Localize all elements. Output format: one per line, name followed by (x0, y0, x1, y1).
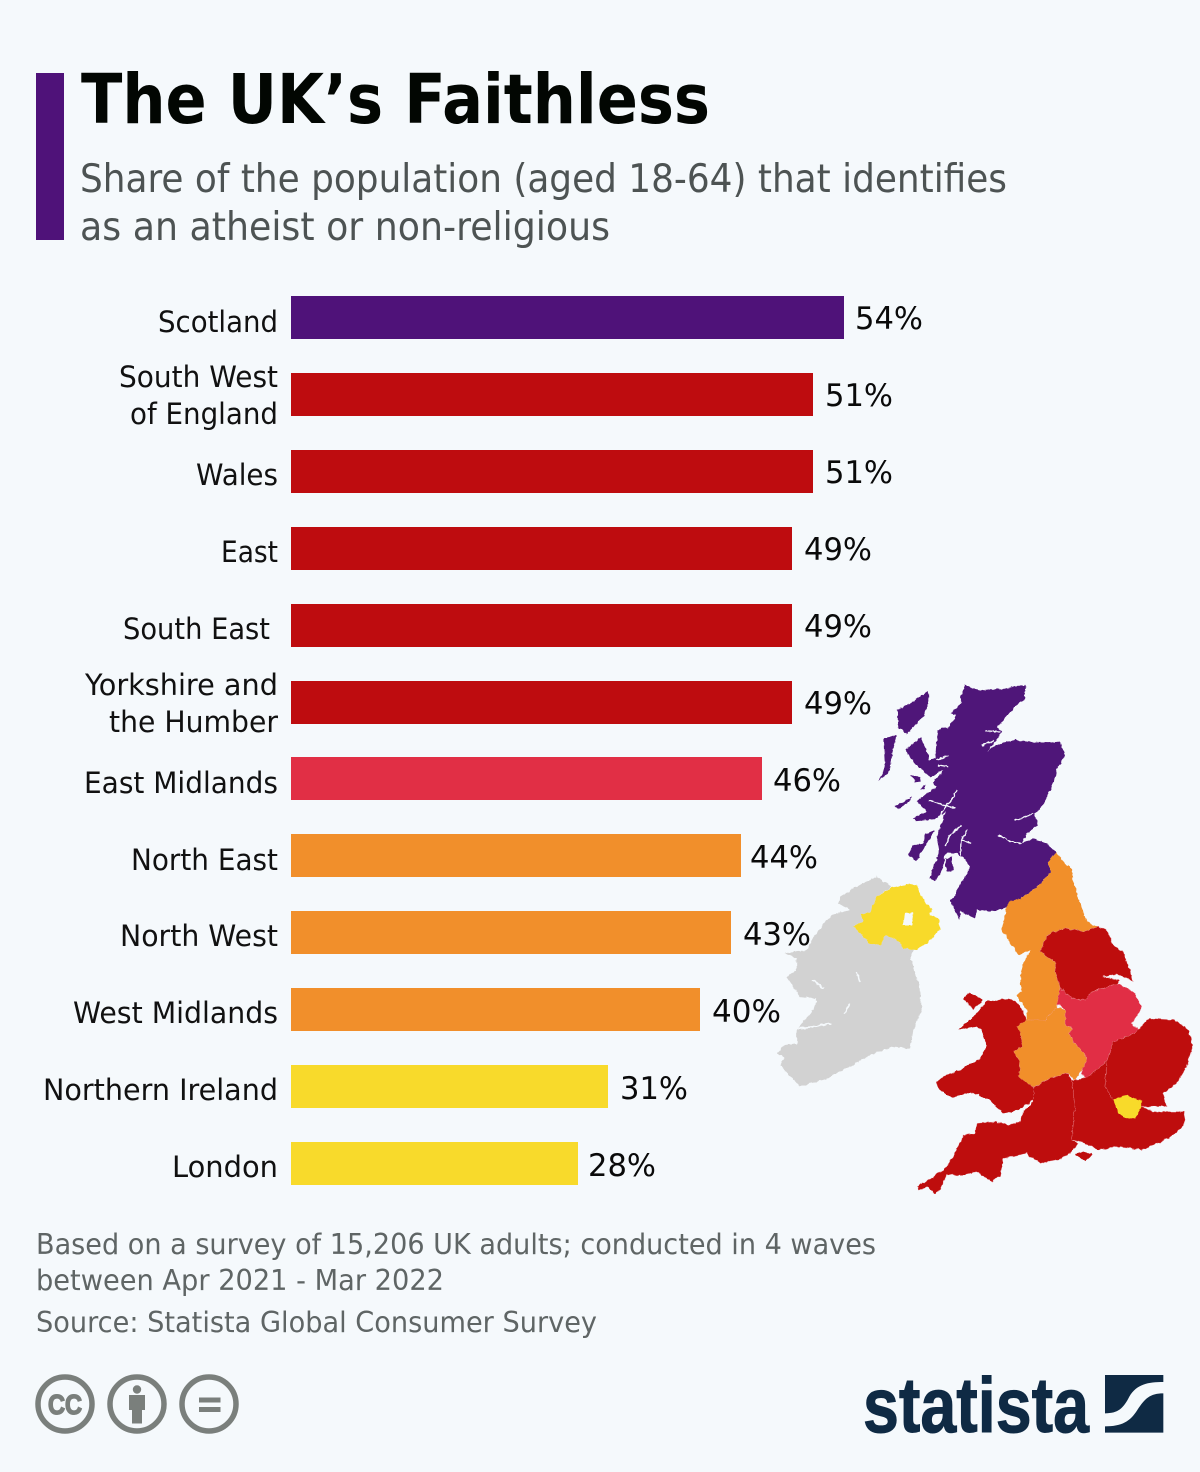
bar: South East 49%: 49% (804, 609, 872, 645)
map region: Yorkshire and the Humber (1040, 927, 1133, 1000)
bar: West Midlands 40%: West Midlands (73, 996, 278, 1030)
bar: South East 49% (123, 604, 872, 647)
bar: South West of England 51%: South West (119, 360, 278, 394)
title: The UK’s Faithless (81, 60, 710, 140)
bar: North West 43% (120, 911, 811, 954)
bar: Yorkshire and the Humber 49%: 49% (804, 686, 872, 722)
bar: North West 43%: North West (120, 919, 278, 953)
bar: East Midlands 46% (84, 757, 841, 800)
title accent bar (36, 73, 64, 240)
icon: attribution person (110, 1377, 164, 1431)
bar: East 49%: 49% (804, 532, 872, 568)
bar: North East 44% (131, 834, 818, 877)
bar: London 28%: London (172, 1150, 278, 1184)
bar: Wales 51%: 51% (825, 455, 893, 491)
bar: London 28% (172, 1142, 656, 1185)
bar: South West of England 51% (119, 360, 893, 431)
map region: South East (1072, 1062, 1185, 1150)
map region: London (1113, 1095, 1142, 1118)
bar: London 28%: 28% (588, 1148, 656, 1184)
map detail: Irish loughs and bays (798, 972, 860, 1028)
map of the UK and Ireland (777, 685, 1193, 1193)
map region: East Midlands (1057, 983, 1142, 1078)
bar: South East 49%: South East (123, 612, 270, 646)
bar: West Midlands 40%: 40% (712, 994, 781, 1030)
bar chart (43, 296, 923, 1185)
bar: North West 43%: 43% (743, 917, 811, 953)
bar: East 49%: East (221, 535, 278, 569)
bar: Scotland 54% (158, 296, 923, 339)
bar: Northern Ireland 31%: Northern Ireland (43, 1073, 278, 1107)
bar: South West of England 51%: of England (130, 397, 278, 431)
map detail: sea lochs in Scotland (928, 731, 1033, 855)
map region: South West (917, 1073, 1078, 1193)
bar: South West of England 51%: 51% (825, 378, 893, 414)
icon: Creative Commons licence badges (38, 1377, 236, 1431)
bar: Wales 51%: Wales (196, 458, 278, 492)
map region: West Midlands (1013, 1007, 1087, 1087)
footnote and source: between Apr 2021 - Mar 2022 (36, 1264, 444, 1297)
footnote and source (36, 1228, 876, 1339)
logo: Statista (863, 1361, 1163, 1449)
icon: no derivatives equals (182, 1377, 236, 1431)
logo wordmark: statista (863, 1361, 1090, 1449)
bar: West Midlands 40% (73, 988, 781, 1031)
map regions: England and Wales (917, 853, 1193, 1193)
map region: North East and North West (1002, 853, 1098, 1020)
bar: Northern Ireland 31% (43, 1065, 688, 1108)
subtitle: Share of the population (aged 18-64) that identifies (80, 156, 1007, 202)
map region: Northern Ireland (853, 884, 940, 950)
icon: CC (38, 1377, 92, 1431)
footnote and source: Source: Statista Global Consumer Survey (36, 1306, 597, 1339)
footnote and source: Based on a survey of 15,206 UK adults; conducted in 4 waves (36, 1228, 876, 1261)
bar: Yorkshire and the Humber 49% (84, 668, 872, 739)
bar: Yorkshire and the Humber 49%: the Humber (109, 705, 279, 739)
bar: Northern Ireland 31%: 31% (620, 1071, 688, 1107)
bar: Yorkshire and the Humber 49%: Yorkshire and (84, 668, 278, 702)
map region: East of England (1105, 1018, 1193, 1107)
bar: North East 44%: 44% (750, 840, 818, 876)
bar: East Midlands 46%: East Midlands (84, 766, 278, 800)
bar: Scotland 54%: Scotland (158, 305, 278, 339)
logo icon (1105, 1375, 1163, 1433)
icon: CC: CC (48, 1389, 82, 1420)
bar: East Midlands 46%: 46% (773, 763, 841, 799)
subtitle (80, 156, 1007, 250)
map region: Scotland (878, 685, 1065, 920)
bar: North East 44%: North East (131, 843, 278, 877)
bar: East 49% (221, 527, 872, 570)
islands: Lewis, Uist, Mull, Islay, Arran, Tiree (878, 691, 954, 872)
bar: Scotland 54%: 54% (855, 301, 923, 337)
map region: Republic of Ireland (777, 877, 922, 1087)
subtitle: as an atheist or non-religious (80, 204, 610, 250)
map region: Wales (936, 993, 1033, 1113)
bar: Wales 51% (196, 450, 893, 493)
